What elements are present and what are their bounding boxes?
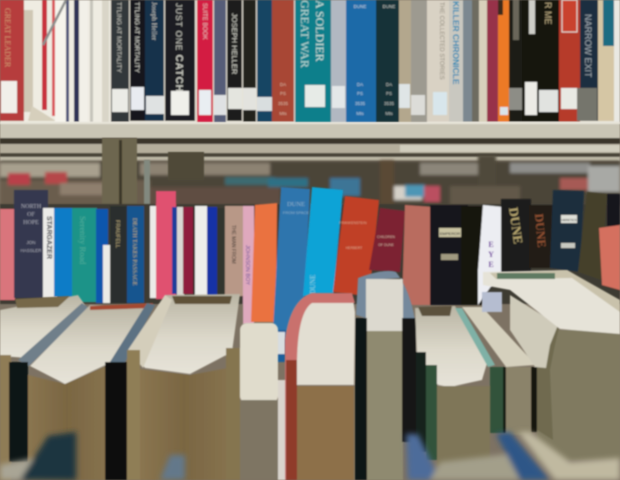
book: Chandler Chronicle <box>449 0 463 122</box>
blue book: Dune: DUNE <box>354 4 366 9</box>
tan and teal book <box>598 0 614 121</box>
teal book: Serenity Road <box>78 216 88 265</box>
red book <box>197 0 213 123</box>
blue and white books <box>96 209 111 303</box>
foreground book 1 <box>0 295 89 480</box>
blue book: Dune Messiah <box>273 187 310 362</box>
black book: Joseph Heller: JOSEPH HELLER <box>230 13 239 75</box>
blue book: Death Takes Passage <box>127 206 144 303</box>
blue book: Dune Messiah: FROM SPACE <box>283 210 309 215</box>
background shelves, blurred <box>0 155 620 208</box>
top shelf of books: TTLING AT MORTALITY <box>133 2 140 73</box>
red-orange book: HERBERT <box>346 246 363 250</box>
cyan book <box>303 187 343 296</box>
foreground book 5 <box>285 293 355 480</box>
dark spines: mortality: TTLING AT MORTALITY <box>115 2 122 73</box>
navy book: North of Hope: JON <box>26 240 36 245</box>
shelf and uprights <box>0 122 620 161</box>
white book: Stargazer <box>43 208 57 298</box>
maroon book <box>487 0 498 122</box>
dark book <box>110 206 127 303</box>
dark navy book: Dune <box>376 0 400 123</box>
white book: Eye: E <box>488 260 494 269</box>
black and cream book <box>522 0 538 122</box>
maroon book: OF DUNE <box>378 243 395 247</box>
red book: SUITE BOOK <box>201 3 207 40</box>
navy book: North of Hope: NORTH <box>21 204 42 210</box>
red book at far left <box>0 0 24 121</box>
book: Chandler Chronicle: KILLER CHRONICLE <box>451 1 461 85</box>
dark book: FRAUFELL <box>114 220 120 248</box>
navy book: North of Hope: HASSLER <box>20 248 42 253</box>
pale pink book <box>243 206 254 324</box>
blue book <box>54 208 72 297</box>
blurred books in the nearest foreground <box>0 432 620 480</box>
blue book: Dune: MIs <box>356 111 364 116</box>
foreground book 3 <box>127 294 240 480</box>
brick red book <box>272 0 294 122</box>
blue book: Dune: 3535 <box>355 101 366 106</box>
cream book: collected stories: THE COLLECTED STORIES <box>438 2 444 80</box>
black book: God Emperor <box>430 205 468 305</box>
black book: Smile: R ME <box>543 2 553 24</box>
narrow mixed spines <box>172 206 226 298</box>
teal book: A Soldier of the Great War: A SOLDIER <box>313 0 327 62</box>
blue book: Death Takes Passage: DEATH TAKES PASSAGE <box>131 218 137 286</box>
pink book <box>0 209 15 300</box>
blue book: Dune Messiah: DUNE <box>287 201 305 208</box>
black book: Just One Catch: JUST ONE CATCH <box>173 3 184 93</box>
white book: Stargazer: STARGAZER <box>45 216 52 259</box>
tan book: The Man from: THE MAN FROM <box>230 225 236 264</box>
foreground book 8 <box>462 307 537 435</box>
metal uprights <box>102 138 204 300</box>
brick red book: PS <box>280 91 286 96</box>
blue book: Dune: PS <box>357 91 363 96</box>
blue book: Dune: DA <box>357 82 363 87</box>
salmon book <box>402 205 433 305</box>
foreground books <box>0 270 620 480</box>
pink book <box>156 191 176 299</box>
dark navy book: Dune: DA <box>386 82 392 87</box>
orange book <box>251 203 277 322</box>
top shelf of books: Joseph Heller <box>150 2 158 41</box>
black book: Joseph Heller <box>227 0 242 121</box>
grey book <box>331 0 346 123</box>
olive book <box>578 192 607 280</box>
pale spines <box>399 0 427 123</box>
navy book: Narrow Exit <box>577 0 598 121</box>
maroon book <box>369 208 405 272</box>
orange book <box>498 0 509 122</box>
teal book: A Soldier of the Great War <box>295 0 331 123</box>
empty shelf bay with bookend <box>24 0 110 123</box>
brick red book: 3535 <box>278 101 289 106</box>
white book: Eye: E <box>488 240 494 249</box>
brick red book: MIs <box>279 111 287 116</box>
foreground book 7 <box>415 306 495 466</box>
black book: God Emperor: EMPEROR <box>440 231 460 236</box>
salmon book at right <box>599 225 620 290</box>
cyan book: DUNE <box>309 275 317 294</box>
cream book: collected stories <box>427 0 449 122</box>
brick red book: DA <box>280 82 286 87</box>
pale pink book: JOHNSON BOY <box>244 245 250 285</box>
black book: Just One Catch <box>165 0 195 121</box>
red-orange book: FRANKENSTEIN <box>339 221 367 225</box>
blue book: Dune <box>346 0 376 123</box>
navy book: North of Hope <box>14 190 48 298</box>
red-orange book <box>333 196 379 296</box>
middle row of books <box>0 187 620 362</box>
dark navy book: Dune: 3535 <box>384 101 395 106</box>
black book with grey label <box>509 0 522 122</box>
black book: Dune: DUNE <box>506 206 526 245</box>
foreground book 9 <box>482 270 620 460</box>
navy book: Heretics of Dune: HERETICS <box>561 218 577 222</box>
teal book: A Soldier of the Great War: GREAT WAR <box>298 0 312 68</box>
black book: Smile <box>538 0 559 122</box>
tan book: The Man from <box>225 206 243 296</box>
dark spines: mortality <box>111 0 129 122</box>
dark navy book: Dune: DUNE <box>383 4 395 9</box>
dark navy book: Dune: PS <box>386 91 392 96</box>
top shelf of books <box>0 0 620 124</box>
navy book: Heretics of Dune <box>550 190 584 272</box>
foreground book 6 <box>355 271 416 480</box>
slate book <box>214 0 226 123</box>
navy book: Narrow Exit: NARROW EXIT <box>583 14 593 78</box>
white book: Eye <box>478 205 503 305</box>
dark book: Dune <box>529 205 554 268</box>
white book: Eye: Y <box>488 250 494 259</box>
teal book <box>72 208 97 302</box>
red book <box>559 0 580 122</box>
maroon book: CHILDREN <box>377 235 395 239</box>
dark book: Dune: DUNE <box>532 213 549 248</box>
foreground book 4 <box>240 323 278 480</box>
navy book: North of Hope: OF <box>27 212 35 218</box>
foreground book 2 <box>28 303 155 480</box>
navy book: North of Hope: HOPE <box>23 220 39 226</box>
dark navy book: Dune: MIs <box>385 111 393 116</box>
black book: Dune <box>501 199 531 272</box>
red book at far left: GREAT LEADER <box>3 8 12 68</box>
